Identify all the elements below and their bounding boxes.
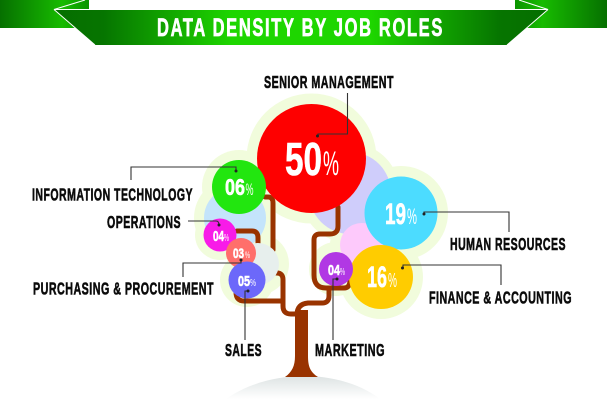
label: purchasing and procurement: PURCHASING & PROCUREMENT (33, 278, 214, 298)
banner body (54, 10, 548, 45)
tree canopy halos (194, 94, 448, 319)
bubble: finance and accounting 16% (349, 245, 413, 309)
pale background circles (204, 152, 391, 267)
bubble: human resources 19% (364, 176, 438, 250)
bubble: operations 04%: % (224, 233, 229, 244)
bubble: purchasing and procurement 03% (226, 238, 256, 268)
right ribbon tail (515, 0, 607, 28)
bubble: human resources 19%: 19 (385, 198, 406, 231)
bubble: marketing 04%: % (340, 267, 345, 278)
bubble: senior management 50%: % (323, 145, 339, 183)
bubble: information technology 06%: 06 (225, 174, 245, 200)
bubble: purchasing and procurement 03%: 03 (233, 245, 244, 261)
label: marketing: MARKETING (315, 340, 385, 360)
bubble: sales 05% (228, 262, 266, 298)
bubble: human resources 19%: % (407, 204, 417, 229)
bubble: information technology 06% (212, 160, 266, 214)
label: information technology: INFORMATION TECHNOLOGY (32, 184, 193, 204)
label: sales: SALES (225, 340, 262, 360)
bubble: purchasing and procurement 03%: % (245, 250, 250, 261)
bubble: finance and accounting 16%: % (388, 270, 397, 292)
bubble: finance and accounting 16%: 16 (367, 261, 387, 294)
bubble: operations 04%: 04 (213, 229, 224, 245)
leader line end dots (218, 134, 426, 292)
tree trunk and branches (236, 197, 350, 377)
bubble: sales 05%: % (250, 277, 256, 289)
pale grey circle (237, 243, 279, 285)
bubble: sales 05%: 05 (238, 273, 250, 290)
bubble: marketing 04%: 04 (328, 263, 340, 279)
bubble: senior management 50%: 50 (285, 133, 322, 185)
title banner (0, 0, 607, 45)
bubble: marketing 04% (319, 252, 353, 286)
bubble: information technology 06%: % (246, 180, 254, 199)
label: senior management: SENIOR MANAGEMENT (264, 72, 394, 92)
bubble: senior management 50% (257, 104, 366, 213)
title: DATA DENSITY BY JOB ROLES (157, 15, 444, 42)
left ribbon tail (0, 0, 89, 28)
leader lines (131, 93, 509, 340)
ground mound (226, 376, 380, 399)
bubble: operations 04% (204, 218, 236, 252)
label: operations: OPERATIONS (107, 212, 181, 232)
